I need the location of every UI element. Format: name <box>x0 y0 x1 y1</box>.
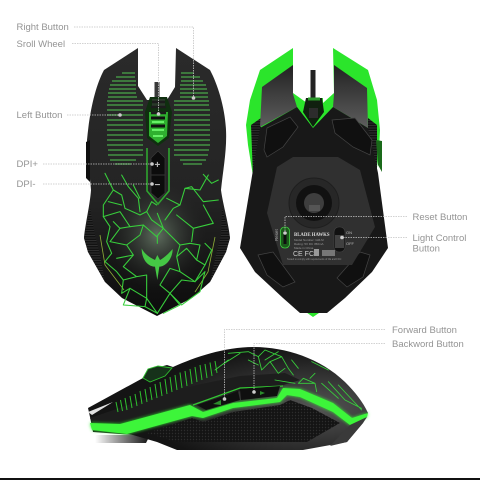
textured side grip <box>147 400 340 442</box>
cable <box>154 82 160 100</box>
base plate <box>240 107 388 313</box>
label: Backword Button: Backword Button <box>392 339 464 350</box>
label: DPI-: DPI- <box>16 179 36 190</box>
label: Sroll Wheel <box>16 39 160 116</box>
scroll wheel <box>145 97 172 146</box>
light control switch <box>334 227 355 252</box>
cable <box>310 70 316 100</box>
product info: Tested to comply with requirements of CE and FCC <box>287 258 342 261</box>
central sheen <box>107 180 207 290</box>
green crackle pattern <box>103 173 218 313</box>
mouse shell <box>88 347 368 450</box>
side grips <box>251 118 377 176</box>
side view mouse <box>88 347 368 450</box>
trim lines <box>100 235 215 292</box>
bottom view mouse <box>240 48 388 317</box>
lower side ribs <box>84 208 105 282</box>
label plate <box>267 157 375 265</box>
reset button <box>274 227 290 248</box>
product info: Made in China <box>294 246 314 250</box>
label: Reset Button: Reset Button <box>412 212 467 223</box>
shadow under nose <box>95 435 150 443</box>
rear tail <box>330 417 367 446</box>
forward/back button recess <box>197 386 280 410</box>
label: DPI- <box>16 179 154 190</box>
wing panels <box>260 65 297 127</box>
crackle on top shell <box>215 350 362 410</box>
light control switch: ON <box>346 230 352 235</box>
optical sensor <box>289 178 339 228</box>
green glow rim <box>246 48 380 176</box>
label: Light Control Button: Button <box>412 244 440 254</box>
connector and cable slot <box>303 98 324 127</box>
label: Left Button: Left Button <box>16 110 62 121</box>
scroll wheel <box>143 366 172 382</box>
light control switch: OFF <box>346 241 355 246</box>
left side button strip <box>86 140 90 182</box>
green glow halo <box>90 388 368 434</box>
white nose highlight <box>88 402 113 415</box>
label: Backword Button <box>252 339 464 394</box>
product info <box>287 233 342 261</box>
label: Forward Button: Forward Button <box>392 325 457 336</box>
green strip <box>90 388 368 434</box>
right button grille <box>174 73 210 164</box>
label: Forward Button <box>223 325 457 401</box>
left button grille <box>107 73 143 164</box>
thin upper green line <box>193 386 283 405</box>
label: Light Control Button: Light Control <box>412 233 466 244</box>
bottom tip glow <box>296 305 331 317</box>
bottom border <box>0 478 480 480</box>
logo: hawk wings <box>142 248 173 280</box>
label: DPI+ <box>16 159 154 170</box>
label: Left Button <box>16 110 122 121</box>
label: Reset Button <box>283 212 467 235</box>
top view mouse <box>84 48 230 316</box>
label: Sroll Wheel: Sroll Wheel <box>16 39 65 50</box>
DPI buttons <box>147 148 169 204</box>
product info: Model Number: GM-M <box>294 238 324 242</box>
skid pads <box>258 117 372 287</box>
reset button: Reset <box>274 228 279 241</box>
DPI buttons: + <box>154 160 160 171</box>
label: Light Control Button <box>340 233 466 254</box>
side button <box>376 140 382 172</box>
DPI buttons: − <box>154 180 160 191</box>
mouse body <box>84 48 230 316</box>
product info: CE FC <box>293 251 314 258</box>
label: Right Button: Right Button <box>16 22 69 33</box>
product info: BLADE HAWKS <box>294 233 330 238</box>
label: DPI+: DPI+ <box>16 159 38 170</box>
label: Right Button <box>16 22 195 100</box>
product info: Rating: 5V DC 350mA <box>294 242 324 246</box>
green top grille <box>116 361 217 412</box>
lower shell band <box>90 373 300 423</box>
